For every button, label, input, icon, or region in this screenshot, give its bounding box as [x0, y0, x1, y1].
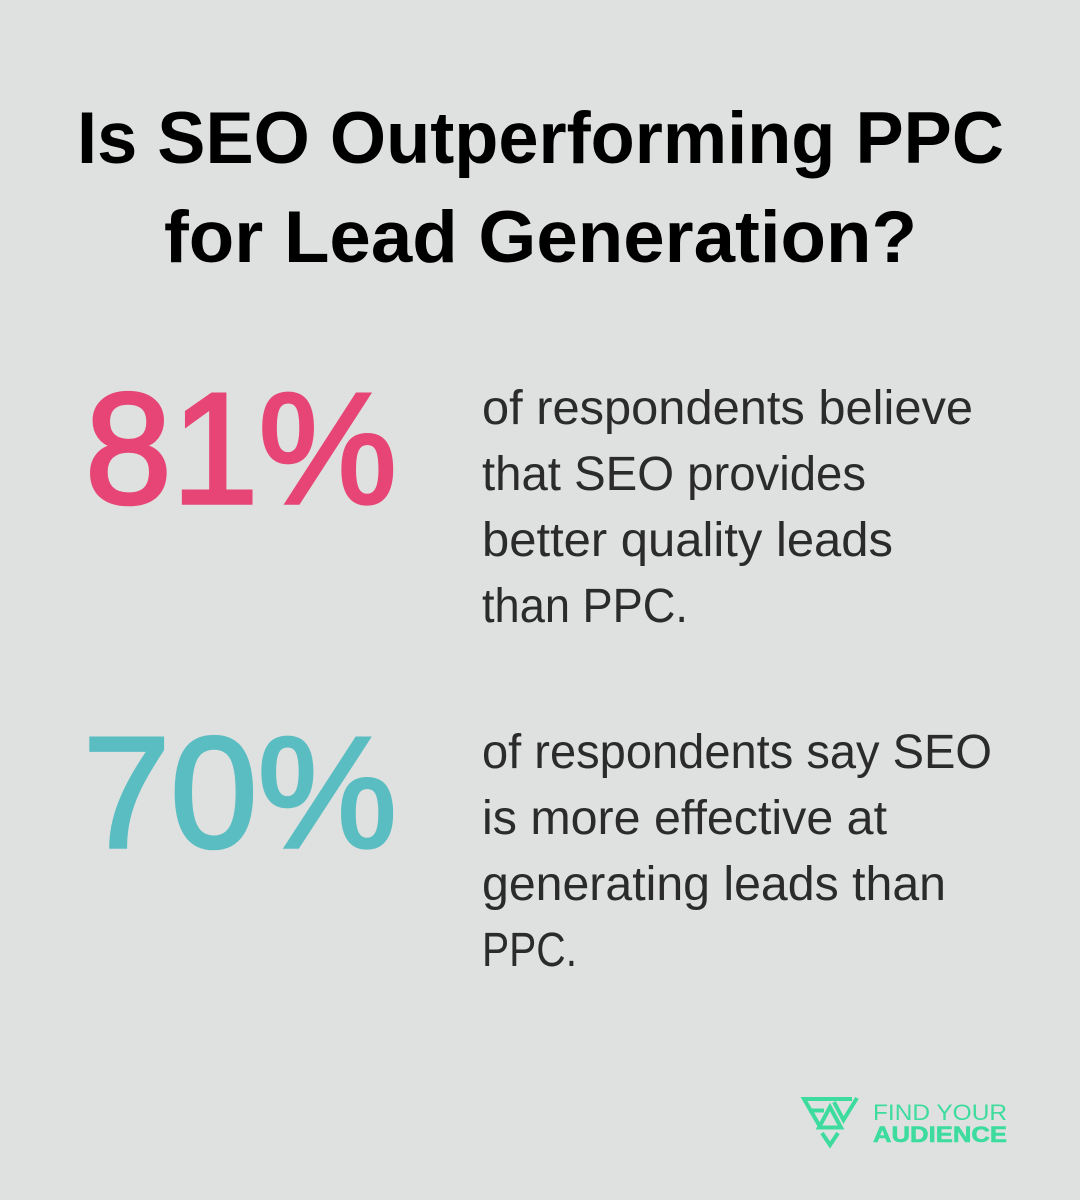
description: 70% stat: is more effective at — [482, 792, 887, 845]
icon: triangle logo mark — [804, 1098, 857, 1145]
stat: 70%: 70% — [83, 705, 397, 881]
logo: Find Your Audience — [804, 1098, 1007, 1147]
logo wordmark: AUDIENCE — [873, 1122, 1007, 1147]
description: 81% stat: than PPC. — [482, 580, 688, 633]
description: 81% stat: that SEO provides — [482, 448, 866, 501]
title — [77, 98, 1004, 278]
description: 81% stat: better quality leads — [482, 514, 893, 567]
title: Is SEO Outperforming PPC — [77, 98, 1004, 179]
description: 81% stat: of respondents believe — [482, 382, 973, 435]
logo wordmark: FIND YOUR — [873, 1100, 1007, 1125]
description: 70% stat: PPC. — [482, 924, 577, 977]
stat: 81%: 81% — [85, 361, 397, 537]
logo wordmark — [873, 1100, 1007, 1147]
description: 70% stat: of respondents say SEO — [482, 726, 992, 779]
description: 70% stat: generating leads than — [482, 858, 946, 911]
title: for Lead Generation? — [164, 197, 917, 278]
description: 81% stat — [482, 382, 973, 633]
description: 70% stat — [482, 726, 992, 977]
